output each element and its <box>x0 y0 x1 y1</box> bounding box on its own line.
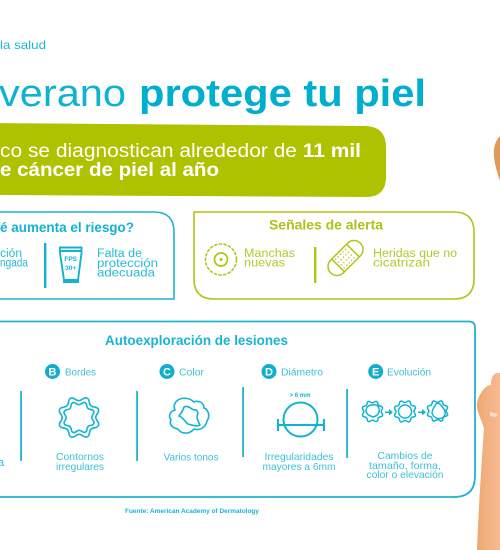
caption: irregular contours <box>56 451 104 473</box>
text: prolonged exposure: ción <box>0 248 22 260</box>
label: evolution: Evolución <box>387 366 431 378</box>
badge E: E <box>372 366 379 378</box>
column B: borders <box>45 364 106 473</box>
panel: warning signs <box>194 212 474 299</box>
heading: warning signs: Señales de alerta <box>269 216 383 232</box>
photo: fingernail <box>490 412 498 417</box>
banner: diagnoses statistic: co se diagnostican alrededor de 11 mil <box>0 141 361 162</box>
panel: risk factors <box>0 212 174 299</box>
caption: changes <box>366 450 444 481</box>
badge B: B <box>49 366 57 378</box>
caption: irregularities larger than 6mm: mayores a 6mm <box>262 461 336 473</box>
divider <box>20 391 22 461</box>
column E: evolution <box>358 364 452 481</box>
heading: self examination: Autoexploración de lesiones <box>105 332 288 348</box>
label: diameter: Diámetro <box>281 366 323 378</box>
text: lack of protection: adecuada <box>97 268 156 280</box>
text: lack of protection <box>97 248 158 280</box>
icon: evolution sequence <box>358 397 452 426</box>
title: protege tu piel <box>139 73 426 115</box>
caption: irregularities larger than 6mm: Irregularidades <box>264 451 334 463</box>
icon: sunscreen tube <box>60 248 82 282</box>
divider <box>242 387 244 457</box>
column C: color <box>160 364 218 464</box>
icon: bandage <box>324 237 367 279</box>
text: lack of protection: Falta de <box>97 248 142 260</box>
text: new spots: Manchas <box>244 248 295 260</box>
text: prolonged exposure: ngada <box>0 258 29 270</box>
caption: changes: tamaño, forma, <box>369 460 441 472</box>
title <box>0 73 426 115</box>
source note: Fuente: American Academy of Dermatology <box>125 509 260 515</box>
text: prolonged exposure <box>0 248 29 270</box>
heading: risk: é aumenta el riesgo? <box>0 219 134 235</box>
icon: irregular borders <box>52 390 106 445</box>
label: color: Color <box>179 366 204 378</box>
photo: arm and hand <box>477 373 500 550</box>
panel: self examination <box>0 322 475 497</box>
icon: sunscreen tube: FPS <box>64 256 78 263</box>
icon: several tones <box>170 398 209 433</box>
caption: changes: Cambios de <box>378 450 433 462</box>
text: new spots <box>244 248 295 270</box>
title: verano <box>0 73 126 115</box>
caption: several tones: Varios tonos <box>164 452 218 464</box>
divider <box>44 243 46 288</box>
caption: irregular contours: irregulares <box>56 461 104 473</box>
icon: spot <box>206 244 236 275</box>
text: wounds that do not heal <box>373 248 457 270</box>
label: borders: Bordes <box>65 366 96 378</box>
text: lack of protection: protección <box>97 258 158 270</box>
photo: child forehead edge <box>494 136 500 181</box>
icon: sunscreen tube: 30+ <box>65 265 76 272</box>
caption: changes: color o elevación <box>366 469 444 481</box>
badge C: C <box>163 366 171 378</box>
caption: irregular contours: Contornos <box>56 451 104 463</box>
divider <box>314 247 316 283</box>
text: wounds that do not heal: Heridas que no <box>373 248 457 260</box>
banner: diagnoses statistic: e cáncer de piel al año <box>0 160 219 181</box>
column D: diameter <box>262 364 336 473</box>
text: wounds that do not heal: cicatrizan <box>373 258 430 270</box>
text: new spots: nuevas <box>244 258 285 270</box>
badge D: D <box>265 366 273 378</box>
divider <box>136 391 138 461</box>
icon: diameter measure: > 6 mm <box>290 393 310 399</box>
banner: diagnoses statistic <box>0 123 386 197</box>
header tagline: la salud <box>0 38 46 52</box>
caption: irregularities larger than 6mm <box>262 451 336 473</box>
divider <box>346 389 348 458</box>
